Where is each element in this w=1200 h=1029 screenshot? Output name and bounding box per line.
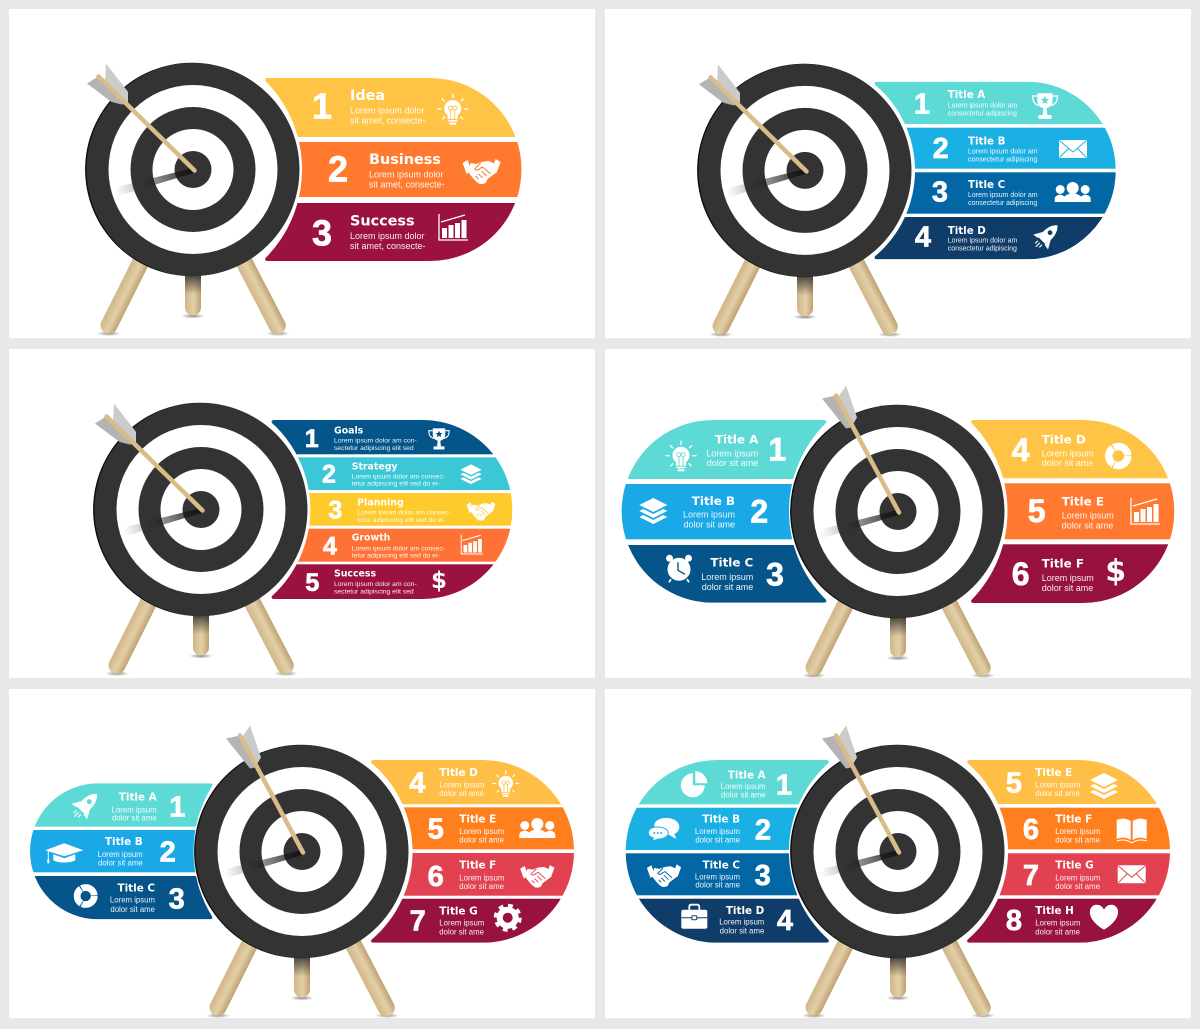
band: 3 Success: Success <box>350 214 415 230</box>
band: 2 Title B: Lorem ipsum <box>695 827 740 836</box>
band: 2 Strategy <box>298 457 510 490</box>
band: 1 Title A: 1 <box>776 769 792 801</box>
band: 5 Success: Success <box>334 569 376 580</box>
band: 2 Title B: 2 <box>933 133 949 165</box>
band: 4 Growth: tetur adipiscing elit sed do ei- <box>352 553 440 560</box>
band: 4 Growth <box>298 528 510 562</box>
band: 1 Title A: 1 <box>914 88 930 120</box>
band: 2 Title B: dolor sit ame <box>683 520 735 530</box>
band: 5 Title E <box>404 807 574 850</box>
band: 4 Title D <box>638 898 829 943</box>
band: 4 Title D: dolor sit ame <box>720 926 764 935</box>
target stand legs <box>709 241 902 338</box>
band: 2 Title B: Title B <box>968 135 1006 147</box>
band: 6 Title F: dolor sit ame <box>1055 835 1100 844</box>
band: 5 Title E: Title E <box>459 813 496 825</box>
band: 1 Title A: Lorem ipsum dolor am <box>948 102 1018 109</box>
band: 5 Title E: Lorem ipsum <box>1035 780 1080 789</box>
band: 6 Title F: Title F <box>1055 813 1092 825</box>
band: 2 Title B: consectetur adipiscing <box>968 156 1037 163</box>
arrow in bullseye <box>822 726 899 852</box>
band: 5 Title E: 5 <box>428 813 444 845</box>
band: 6 Title F: Title F <box>1042 557 1084 571</box>
band: 3 Planning: tetur adipiscing elit sed do ei- <box>357 517 445 524</box>
band: 1 Title A <box>20 783 220 827</box>
band: 4 Title D <box>874 217 1102 260</box>
band: 7 Title G: Title G <box>1055 860 1094 872</box>
band: 3 Title C: Title C <box>703 860 740 872</box>
band: 1 Title A: Lorem ipsum <box>721 782 766 791</box>
band: 4 Title D: 4 <box>409 767 425 799</box>
band: 2 Business: Lorem ipsum dolor <box>369 169 444 179</box>
band: 8 Title H: 8 <box>1006 905 1022 937</box>
band: 4 Growth: Lorem ipsum dolor am consec- <box>352 545 445 552</box>
band: 6 Title F: dolor sit ame <box>1042 583 1093 593</box>
band: 2 Title B: Title B <box>702 814 740 826</box>
band: 4 Title D: Lorem ipsum dolor am <box>948 238 1018 245</box>
target board <box>697 64 912 277</box>
band: 5 Success: Lorem ipsum dolor am con- <box>334 581 417 588</box>
panel: seven-step target (Title A to G) <box>9 689 595 1019</box>
band: 2 Title B: Title B <box>692 494 735 508</box>
band: 5 Title E: Title E <box>1035 767 1072 779</box>
band: 3 Success: sit amet, consecte- <box>350 241 426 251</box>
panel: six-step target (Title A to F) <box>605 349 1191 679</box>
band: 3 Title C: Lorem ipsum <box>695 872 740 881</box>
band: 4 Title D: Lorem ipsum <box>719 918 764 927</box>
band: 2 Strategy: Lorem ipsum dolor am consec- <box>352 473 445 480</box>
band: 1 Title A <box>628 420 826 479</box>
band: 4 Title D: Lorem ipsum <box>1042 449 1094 459</box>
band: 3 Title C: Title C <box>118 883 155 895</box>
band: 3 Planning: 3 <box>328 497 342 525</box>
band: 5 Title E: dolor sit ame <box>459 835 504 844</box>
band: 1 Title A: Lorem ipsum <box>706 449 758 459</box>
band: 1 Title A: 1 <box>169 792 185 824</box>
target stand legs <box>97 240 290 337</box>
band: 7 Title G <box>371 898 561 943</box>
band: 5 Title E: Lorem ipsum <box>459 827 504 836</box>
band: 1 Goals: 1 <box>305 425 319 453</box>
target stand legs <box>206 922 399 1019</box>
band: 5 Title E <box>1004 483 1174 540</box>
band: 4 Title D: 4 <box>915 222 931 254</box>
band: 5 Success: sectetur adipiscing elit sed <box>334 588 414 595</box>
band: 2 Title B: dolor sit ame <box>98 858 143 867</box>
band: 2 Title B: Lorem ipsum dolor am <box>968 148 1038 155</box>
target board <box>790 745 1004 958</box>
target board <box>790 405 1004 618</box>
band: 3 Planning <box>309 493 512 526</box>
band: 7 Title G: dolor sit ame <box>439 927 484 936</box>
band: 3 Title C <box>626 853 798 896</box>
band: 5 Title E: dolor sit ame <box>1035 789 1080 798</box>
band: 3 Title C: 3 <box>755 860 771 892</box>
band: 7 Title G: 7 <box>410 906 426 938</box>
panel: five-step target (Goals to Success) <box>9 349 595 678</box>
band: 7 Title G: Lorem ipsum <box>1055 873 1100 882</box>
band: 4 Title D <box>971 420 1168 478</box>
band: 3 Title C: Title C <box>968 179 1005 191</box>
arrow in bullseye <box>822 386 899 512</box>
band: 5 Success <box>272 564 494 599</box>
band: 3 Title C: 3 <box>169 883 185 915</box>
band: 6 Title F <box>971 544 1168 603</box>
band: 5 Title E: Title E <box>1062 495 1104 509</box>
band: 4 Title D: Title D <box>726 905 765 917</box>
band: 1 Title A: 1 <box>768 431 786 467</box>
band: 2 Title B <box>30 830 196 872</box>
band: 8 Title H: Lorem ipsum <box>1035 919 1080 928</box>
band: 2 Strategy: Strategy <box>352 461 398 472</box>
band: 4 Title D: 4 <box>777 905 793 937</box>
band: 2 Title B <box>906 128 1116 169</box>
band: 4 Title D: consectetur adipiscing <box>948 246 1017 253</box>
band: 2 Title B: 2 <box>750 494 768 530</box>
band: 3 Title C: dolor sit ame <box>695 881 740 890</box>
band: 4 Title D: Title D <box>948 225 986 237</box>
band: 2 Title B: dolor sit ame <box>695 835 740 844</box>
band: 3 Success: Lorem ipsum dolor <box>350 231 425 241</box>
band: 3 Title C: 3 <box>766 556 784 592</box>
band: 6 Title F: Lorem ipsum <box>1055 827 1100 836</box>
band: 3 Planning: Lorem ipsum dolor am consec- <box>357 510 451 517</box>
band: 1 Title A: dolor sit ame <box>721 790 766 799</box>
target stand legs <box>802 922 995 1019</box>
band: 3 Title C: Lorem ipsum dolor am <box>968 192 1038 199</box>
band: 2 Title B: Lorem ipsum <box>683 510 735 520</box>
band: 1 Title A: Title A <box>715 432 759 446</box>
band: 2 Title B: Title B <box>105 836 143 848</box>
band: 1 Title A <box>874 82 1102 124</box>
arrow in bullseye <box>95 404 202 510</box>
arrow in bullseye <box>87 64 194 170</box>
band: 2 Title B: Lorem ipsum <box>98 850 143 859</box>
band: 1 Goals: Lorem ipsum dolor am con- <box>334 438 417 445</box>
band: 1 Title A: Lorem ipsum <box>112 805 157 814</box>
band: 2 Business <box>298 142 522 197</box>
band: 1 Idea: sit amet, consecte- <box>350 115 426 125</box>
band: 4 Title D: 4 <box>1012 432 1030 468</box>
target board <box>93 403 308 616</box>
band: 2 Title B <box>622 484 792 540</box>
band: 4 Title D: dolor sit ame <box>1042 458 1093 468</box>
band: 3 Title C <box>34 876 212 920</box>
band: 1 Title A: dolor sit ame <box>707 458 758 468</box>
band: 1 Goals <box>272 420 494 454</box>
target board <box>85 63 300 276</box>
panel: eight-step target (Title A to H) <box>605 689 1191 1019</box>
band: 3 Title C: dolor sit ame <box>702 582 753 592</box>
band: 6 Title F: Title F <box>459 860 496 872</box>
band: 3 Title C: dolor sit ame <box>110 905 155 914</box>
band: 4 Title D: Lorem ipsum <box>439 780 484 789</box>
band: 1 Idea: Lorem ipsum dolor <box>350 105 425 115</box>
band: 5 Success: $ <box>431 568 447 594</box>
band: 1 Idea <box>265 78 516 137</box>
panel: four-step target (Title A to D) <box>605 9 1191 338</box>
band: 3 Title C <box>906 172 1116 214</box>
band: 6 Title F: 6 <box>428 861 444 893</box>
band: 5 Title E: dolor sit ame <box>1062 520 1113 530</box>
band: 2 Title B <box>626 808 798 850</box>
band: 1 Title A: dolor sit ame <box>112 814 157 823</box>
band: 2 Business: 2 <box>328 148 348 190</box>
band: 8 Title H: dolor sit ame <box>1035 927 1080 936</box>
band: 5 Success: 5 <box>305 569 319 597</box>
band: 1 Goals: sectetur adipiscing elit sed <box>334 445 414 452</box>
band: 6 Title F <box>1000 808 1170 850</box>
band: 4 Title D: Title D <box>439 767 478 779</box>
band: 3 Title C: 3 <box>932 177 948 209</box>
band: 1 Goals: Goals <box>334 425 364 436</box>
band: 1 Title A: Title A <box>119 792 157 804</box>
arrow in bullseye <box>699 64 806 171</box>
band: 2 Title B: 2 <box>160 837 176 869</box>
band: 7 Title G: Title G <box>439 905 478 917</box>
band: 6 Title F: 6 <box>1023 814 1039 846</box>
band: 2 Business: Business <box>369 152 441 168</box>
band: 4 Title D: dolor sit ame <box>439 789 484 798</box>
band: 7 Title G: dolor sit ame <box>1055 882 1100 891</box>
band: 5 Title E: 5 <box>1006 767 1022 799</box>
band: 3 Success <box>265 203 516 261</box>
band: 3 Title C: consectetur adipiscing <box>968 200 1037 207</box>
target stand legs <box>802 582 995 679</box>
band: 8 Title H: Title H <box>1035 905 1074 917</box>
band: 3 Planning: Planning <box>357 497 404 508</box>
band: 2 Strategy: 2 <box>322 461 336 489</box>
band: 3 Title C: Lorem ipsum <box>110 896 155 905</box>
band: 4 Growth: Growth <box>352 533 390 544</box>
band: 6 Title F: dolor sit ame <box>459 882 504 891</box>
band: 1 Title A: Title A <box>948 89 985 101</box>
band: 5 Title E <box>967 760 1157 804</box>
band: 7 Title G: Lorem ipsum <box>439 919 484 928</box>
band: 6 Title F: Lorem ipsum <box>1042 573 1094 583</box>
panel: three-step target (Idea, Business, Success) <box>9 9 595 338</box>
band: 3 Success: 3 <box>312 212 332 254</box>
target board <box>194 745 408 958</box>
band: 1 Title A: Title A <box>728 769 766 781</box>
band: 6 Title F: $ <box>1105 554 1126 589</box>
band: 5 Title E: Lorem ipsum <box>1062 510 1114 520</box>
band: 4 Growth: 4 <box>323 533 337 561</box>
band: 6 Title F <box>404 853 574 896</box>
band: 2 Strategy: tetur adipiscing elit sed do ei- <box>352 481 440 488</box>
band: 3 Title C <box>628 545 826 603</box>
band: 1 Idea: Idea <box>350 88 385 104</box>
band: 8 Title H <box>967 898 1157 943</box>
band: 4 Title D: Title D <box>1042 432 1086 446</box>
band: 1 Title A: consectetur adipiscing <box>948 110 1017 117</box>
band: 2 Title B: 2 <box>755 814 771 846</box>
target stand legs <box>105 580 298 677</box>
band: 4 Title D <box>371 760 561 804</box>
band: 2 Business: sit amet, consecte- <box>369 179 445 189</box>
band: 1 Idea: 1 <box>312 86 332 126</box>
band: 5 Title E: 5 <box>1028 493 1046 529</box>
band: 1 Title A <box>638 760 829 804</box>
arrow in bullseye <box>226 726 303 852</box>
band: 3 Title C: Lorem ipsum <box>701 572 753 582</box>
band: 3 Title C: Title C <box>710 556 753 570</box>
band: 6 Title F: Lorem ipsum <box>459 873 504 882</box>
band: 7 Title G: 7 <box>1023 860 1039 892</box>
band: 6 Title F: 6 <box>1012 556 1030 592</box>
band: 7 Title G <box>999 853 1170 896</box>
